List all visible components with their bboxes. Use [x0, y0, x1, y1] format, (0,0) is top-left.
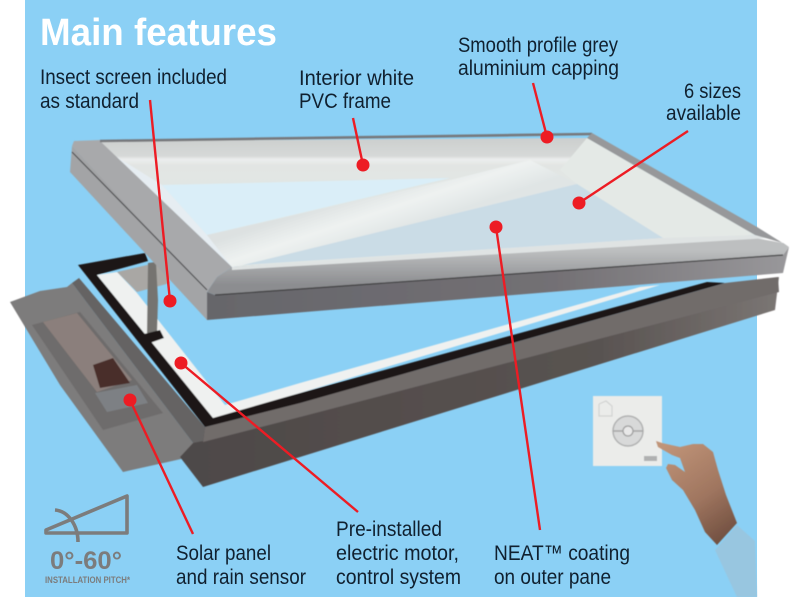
callout: capping: Smooth profile grey — [458, 34, 618, 57]
callout: capping: aluminium capping — [458, 57, 619, 80]
motor slot — [140, 330, 164, 344]
callout: NEAT coating: on outer pane — [494, 566, 611, 589]
callout: insect screen: as standard — [40, 90, 139, 113]
callout: sizes: 6 sizes — [684, 80, 741, 103]
sash side — [70, 146, 207, 320]
right frame — [560, 138, 755, 238]
chain actuator — [147, 262, 158, 333]
controller home icon — [599, 401, 612, 416]
white strip — [97, 272, 660, 418]
callout: motor — [174, 356, 461, 589]
left groove — [72, 152, 207, 290]
callout: solar panel: and rain sensor — [176, 566, 306, 589]
callout: PVC frame: PVC frame — [299, 90, 391, 113]
callout: sizes: available — [666, 102, 741, 125]
solar panel — [43, 313, 132, 392]
far strip — [117, 262, 170, 292]
callout: insect screen — [40, 66, 227, 308]
callout: NEAT coating: NEAT™ coating — [494, 542, 630, 565]
callout: NEAT coating — [490, 220, 630, 589]
callout: solar panel — [124, 394, 306, 589]
black gasket — [78, 253, 725, 427]
pitch icon — [45, 496, 130, 585]
callout: motor: Pre-installed — [336, 518, 442, 541]
kerb box — [180, 277, 779, 487]
glass left — [162, 178, 450, 235]
kerb left rim — [72, 278, 205, 443]
right edge — [587, 133, 789, 247]
callout: PVC frame — [299, 67, 414, 172]
flashing — [10, 283, 193, 472]
pitch label: INSTALLATION PITCH* — [45, 575, 130, 585]
solar panel housing — [32, 312, 163, 430]
shirt sleeve — [715, 525, 757, 597]
callout: solar panel: Solar panel — [176, 542, 271, 565]
callout: sizes — [572, 80, 741, 210]
rear edge — [100, 134, 592, 141]
rain sensor — [95, 385, 148, 412]
title: Main features — [40, 12, 277, 54]
top frame — [100, 138, 755, 267]
callout: capping — [458, 34, 619, 144]
callout: motor: control system — [336, 566, 461, 589]
callout: insect screen: Insect screen included — [40, 66, 227, 89]
sash front cap — [207, 237, 789, 295]
solar cell window — [93, 358, 130, 388]
front inner edge — [232, 235, 770, 270]
glass middle band — [207, 160, 577, 267]
sash left cap — [72, 140, 232, 292]
wall controller — [593, 396, 662, 466]
kerb rim — [203, 277, 779, 442]
controller dial — [613, 416, 643, 446]
hand — [656, 441, 737, 545]
glass right — [243, 184, 663, 265]
left reveal — [117, 157, 243, 267]
sash front lower — [207, 247, 789, 320]
pitch value: 0°-60° — [50, 547, 122, 575]
callout: motor: electric motor, — [336, 542, 459, 565]
sash groove — [215, 255, 783, 295]
illustration: lower roof frame and flashing — [10, 133, 789, 487]
callout: PVC frame: Interior white — [299, 67, 414, 90]
